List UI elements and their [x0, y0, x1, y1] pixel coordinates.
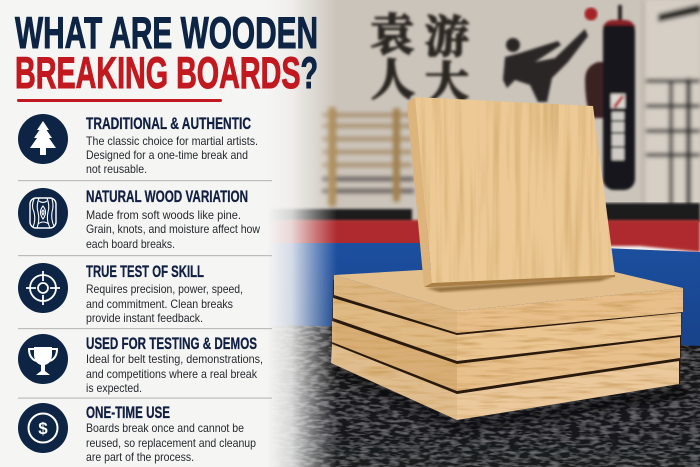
board 3 [332, 321, 680, 391]
calligraphy on wall: 游 [425, 1, 469, 65]
description: is expected. [86, 382, 142, 395]
black rubber mat [230, 325, 700, 467]
calligraphy on wall: 袁 [370, 0, 414, 63]
wall column and right bay [642, 0, 700, 210]
stack shadow [328, 362, 690, 432]
description [86, 135, 258, 176]
description: The classic choice for martial artists. [86, 135, 258, 148]
title underline [17, 99, 222, 102]
description: and commitment. Clean breaks [86, 298, 233, 311]
board 1 [334, 270, 683, 333]
description: Grain, knots, and moisture affect how [86, 223, 261, 236]
icon: pine tree [18, 114, 68, 164]
calligraphy on wall [370, 0, 469, 111]
dark gaps [331, 280, 682, 420]
heading: USED FOR TESTING & DEMOS [86, 335, 257, 353]
description [86, 209, 261, 251]
kicker silhouette [503, 29, 588, 102]
description: Requires precision, power, speed, [86, 283, 243, 296]
stack of wooden boards [328, 270, 690, 432]
description [86, 353, 263, 395]
standing wooden board [407, 97, 615, 292]
item: used for testing and demos [18, 334, 263, 395]
description [86, 283, 243, 325]
panel: dojo background photo [230, 0, 700, 467]
title: BREAKING BOARDS? [15, 49, 318, 98]
heading: TRUE TEST OF SKILL [86, 263, 204, 281]
left fade panel [0, 0, 268, 467]
front face [415, 97, 615, 283]
description: each board breaks. [86, 238, 175, 251]
description [86, 422, 256, 464]
description: Designed for a one-time break and [86, 149, 248, 162]
red sun dot [584, 8, 598, 20]
punching bag [585, 5, 635, 190]
item: traditional and authentic [18, 114, 258, 176]
description: are part of the process. [86, 451, 194, 464]
item: one-time use [18, 403, 256, 464]
description: reused, so replacement and cleanup [86, 437, 256, 450]
wooden wall rack [322, 107, 414, 207]
description: not reusable. [86, 163, 147, 176]
icon: dollar coin [18, 403, 68, 453]
floor edge, red and blue mats [230, 203, 700, 350]
calligraphy on wall: 大 [425, 47, 469, 111]
description: Made from soft woods like pine. [86, 209, 241, 222]
icon: trophy [18, 334, 68, 384]
item: natural wood variation [18, 188, 261, 251]
icon: target [18, 263, 68, 313]
heading: NATURAL WOOD VARIATION [86, 188, 248, 206]
side face [407, 97, 432, 287]
board 4 [331, 344, 679, 420]
description: Boards break once and cannot be [86, 422, 244, 435]
icon: wood grain [18, 188, 68, 238]
board 2 [333, 298, 681, 361]
description: and competitions where a real break [86, 368, 257, 381]
description: provide instant feedback. [86, 312, 203, 325]
heading: TRADITIONAL & AUTHENTIC [86, 115, 251, 133]
contact shadow [426, 276, 615, 292]
icon: dollar coin: $ [38, 419, 48, 438]
calligraphy on wall: 人 [371, 44, 415, 108]
description: Ideal for belt testing, demonstrations, [86, 353, 263, 366]
title: WHAT ARE WOODEN [15, 9, 318, 58]
title [15, 9, 318, 98]
item: true test of skill [18, 263, 243, 325]
heading: ONE-TIME USE [86, 404, 170, 422]
